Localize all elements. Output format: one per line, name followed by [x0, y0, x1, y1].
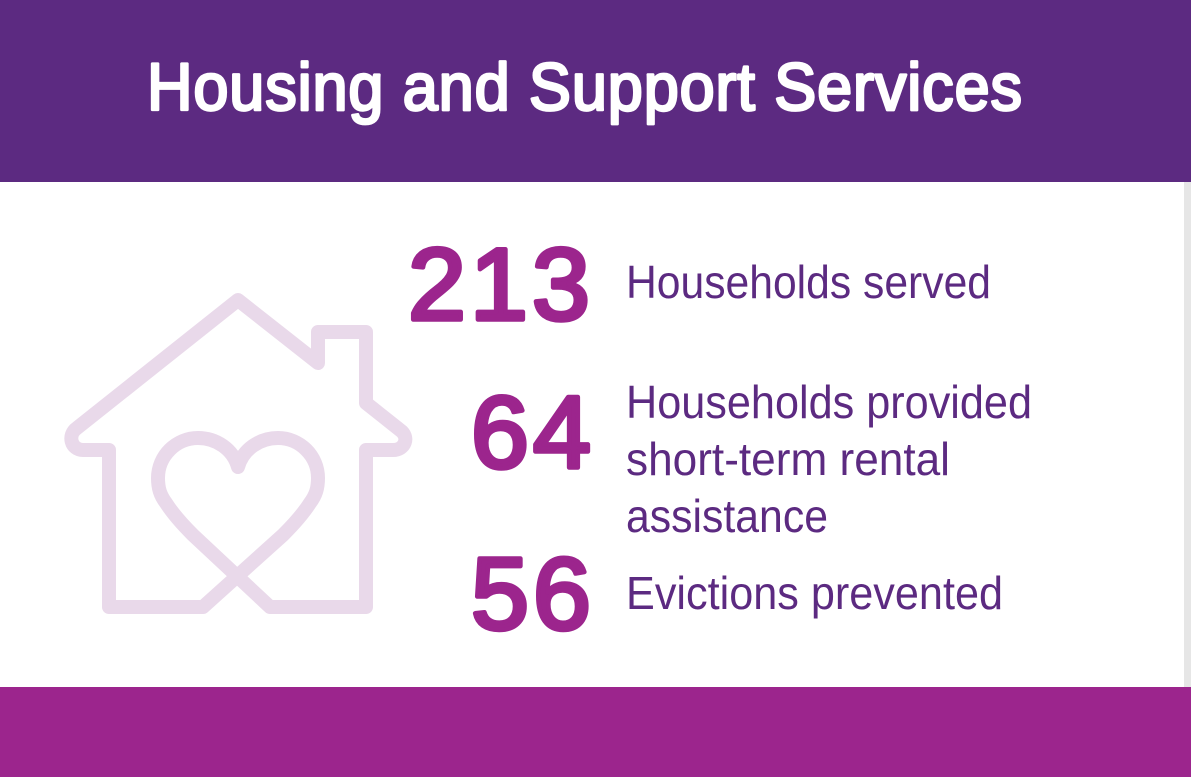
- header band: [0, 0, 1191, 182]
- stat: 213 households served: [408, 228, 991, 342]
- label: short-term rental assistance: [626, 376, 1032, 542]
- number: 56: 56: [471, 537, 595, 651]
- footer band: [0, 687, 1191, 777]
- label: evictions prevented: Evictions prevented: [626, 567, 1003, 619]
- number: 213: 213: [408, 228, 594, 342]
- stat: 64 households provided rental assistance: [471, 376, 1032, 542]
- number: 64: 64: [471, 376, 595, 490]
- title: Housing and Support Services: [147, 49, 1022, 124]
- label: short-term rental assistance: short-term rental: [626, 433, 950, 485]
- label: households served: Households served: [626, 256, 991, 308]
- stat: 56 evictions prevented: [471, 537, 1003, 651]
- icon: house with heart: [71, 300, 405, 607]
- label: short-term rental assistance: Households provided: [626, 376, 1032, 428]
- label: short-term rental assistance: assistance: [626, 490, 828, 542]
